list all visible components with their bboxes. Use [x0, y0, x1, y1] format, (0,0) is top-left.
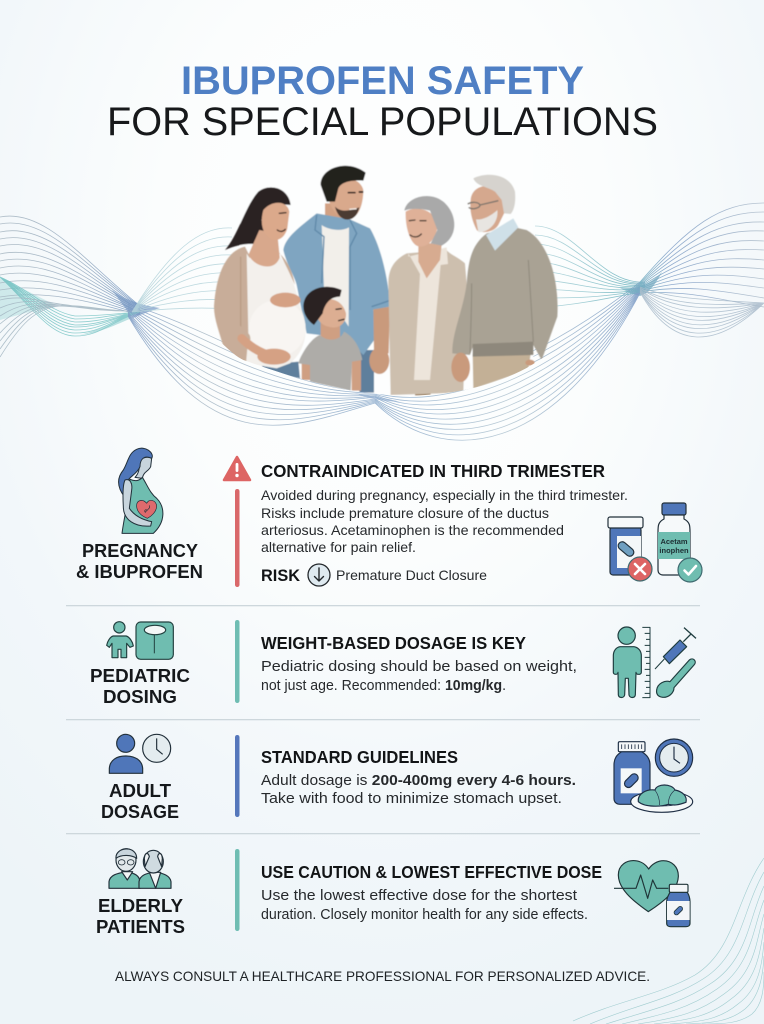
accent bar: teal — [235, 849, 240, 931]
footer note: ALWAYS CONSULT A HEALTHCARE PROFESSIONAL FOR PERSONALIZED ADVICE. — [115, 968, 650, 984]
text block: pediatric: Pediatric dosing should be based on weight, — [261, 658, 577, 675]
icon: heart and bottle — [614, 861, 690, 927]
risk row: RISK — [261, 566, 301, 585]
text block: pregnancy — [261, 487, 628, 555]
icon: warning triangle — [224, 457, 250, 480]
icon: pregnant woman — [119, 448, 163, 533]
icon: elderly couple — [109, 849, 171, 888]
risk row: Premature Duct Closure — [336, 567, 487, 583]
title: IBUPROFEN SAFETY — [181, 59, 584, 103]
text block: pregnancy: alternative for pain relief. — [261, 539, 416, 555]
panel: pediatric — [90, 620, 696, 707]
divider — [66, 833, 700, 834]
icon: medicine bottles — [608, 503, 702, 582]
accent bar: teal — [235, 620, 240, 703]
photo backing — [240, 150, 533, 397]
icon: child and scale — [107, 622, 173, 659]
icon: height, syringe, spoon — [613, 627, 696, 698]
heading: standard guidelines: STANDARD GUIDELINES — [261, 747, 458, 767]
man — [283, 166, 390, 393]
heading: use caution: USE CAUTION & LOWEST EFFECTIVE DOSE — [261, 862, 602, 882]
text block: pregnancy: Avoided during pregnancy, especially in the third trimester. — [261, 487, 628, 503]
label: adult: DOSAGE — [101, 802, 179, 822]
label: adult: ADULT — [109, 781, 171, 801]
label: elderly: PATIENTS — [96, 917, 185, 937]
icon: bottle, clock, plate — [614, 739, 693, 812]
heading: weight-based: WEIGHT-BASED DOSAGE IS KEY — [261, 633, 526, 653]
grandmother — [388, 196, 467, 397]
title: FOR SPECIAL POPULATIONS — [107, 100, 658, 144]
risk row — [261, 564, 487, 586]
corner wave lines — [573, 858, 764, 1024]
label: pregnancy: & IBUPROFEN — [76, 562, 203, 582]
text block: elderly: Use the lowest effective dose for the shortest — [261, 887, 578, 904]
label: elderly — [96, 896, 185, 937]
photo: family group — [214, 150, 558, 397]
label: pediatric: PEDIATRIC — [90, 666, 190, 686]
label: pregnancy: PREGNANCY — [82, 541, 198, 561]
accent bar: blue — [235, 735, 240, 817]
grandfather — [451, 175, 558, 389]
icon: adult and clock — [109, 734, 171, 773]
label: pregnancy — [76, 541, 203, 582]
label: pediatric: DOSING — [103, 687, 177, 707]
title — [107, 59, 658, 144]
icon: medicine bottles: inophen — [659, 546, 689, 555]
text block: adult: Take with food to minimize stomach upset. — [261, 790, 562, 807]
text block: adult — [261, 772, 576, 807]
pregnant woman — [214, 187, 306, 378]
text block: adult: Adult dosage is 200-400mg every 4-6 hours. — [261, 772, 576, 789]
icon: medicine bottles: Acetam — [660, 537, 688, 546]
text block: elderly: duration. Closely monitor health for any side effects. — [261, 906, 588, 923]
label: elderly: ELDERLY — [98, 896, 183, 916]
text block: pediatric: not just age. Recommended: 10mg/kg. — [261, 677, 506, 694]
text block: pediatric — [261, 658, 577, 694]
child — [298, 287, 362, 391]
label: pediatric — [90, 666, 190, 707]
panel: adult — [101, 734, 693, 822]
wave graphic — [0, 203, 764, 440]
text block: pregnancy: arteriosus. Acetaminophen is the recommended — [261, 522, 564, 538]
label: adult — [101, 781, 179, 822]
divider — [66, 605, 700, 606]
divider — [66, 719, 700, 720]
accent bar: red — [235, 489, 240, 587]
panel: elderly — [96, 849, 690, 937]
text block: elderly — [261, 887, 588, 923]
panel: pregnancy — [76, 448, 702, 587]
heading: contraindicated: CONTRAINDICATED IN THIRD TRIMESTER — [261, 461, 605, 481]
text block: pregnancy: Risks include premature closure of the ductus — [261, 505, 549, 521]
